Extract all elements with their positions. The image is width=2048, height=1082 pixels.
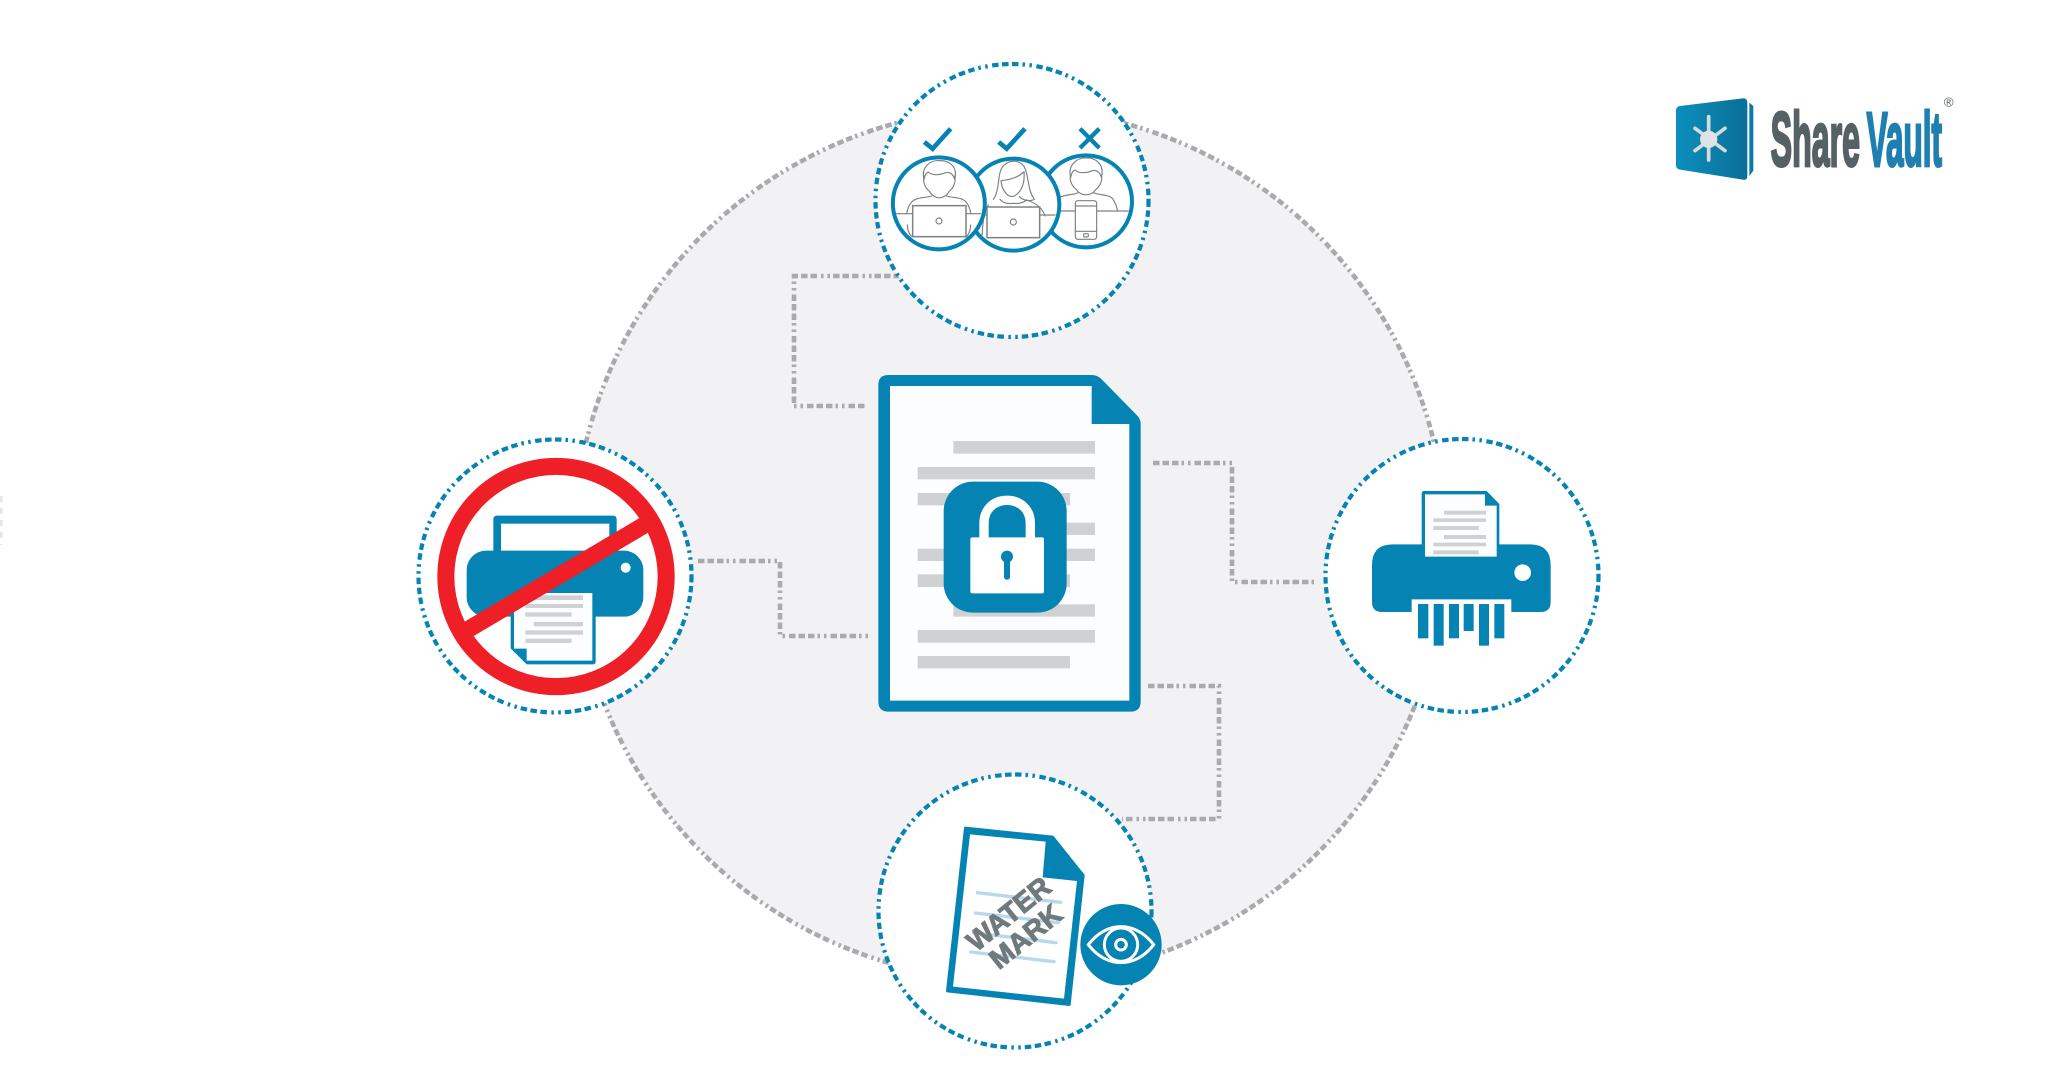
printer button <box>621 563 631 573</box>
icon: check mark <box>999 129 1025 149</box>
logo: ShareVault <box>1676 95 1954 183</box>
shredder button <box>1514 564 1531 581</box>
user with laptop, woman <box>967 159 1059 251</box>
panel: no printing <box>418 440 692 712</box>
faint mark at left edge <box>0 496 2 545</box>
document text lines <box>918 441 1095 668</box>
connectors <box>698 276 1317 819</box>
logo wordmark: Share <box>1771 97 1860 183</box>
icon: prohibition sign <box>446 466 666 687</box>
logo icon: vault door <box>1676 98 1753 180</box>
user with laptop, man <box>893 157 985 249</box>
icon: eye <box>1080 904 1162 985</box>
icon: check mark <box>924 129 951 149</box>
icon: watermarked document <box>947 828 1083 1005</box>
printed page <box>511 593 596 664</box>
panel: user permissions <box>876 64 1148 337</box>
panel: remote shred <box>1326 439 1598 712</box>
icon: printer body <box>467 551 643 617</box>
infographic: document security diagram: Vault <box>1867 97 1942 183</box>
background circle <box>574 108 1446 980</box>
watermark text: MARK <box>983 898 1068 975</box>
watermark text: WATER <box>960 871 1057 957</box>
user with phone, denied <box>1040 155 1132 247</box>
icon: cross mark <box>1080 129 1099 148</box>
icon: padlock <box>944 482 1067 613</box>
icon: printer paper tray <box>493 516 617 559</box>
central locked document <box>878 375 1141 712</box>
panel: watermark view <box>878 774 1162 1048</box>
tray opening <box>501 524 609 554</box>
shredded strips <box>1418 604 1504 646</box>
registered mark: ® <box>1944 95 1954 110</box>
document entering shredder <box>1422 491 1499 557</box>
document outline <box>878 375 1141 712</box>
icon: shredder body <box>1372 544 1551 612</box>
document page <box>890 386 1129 701</box>
